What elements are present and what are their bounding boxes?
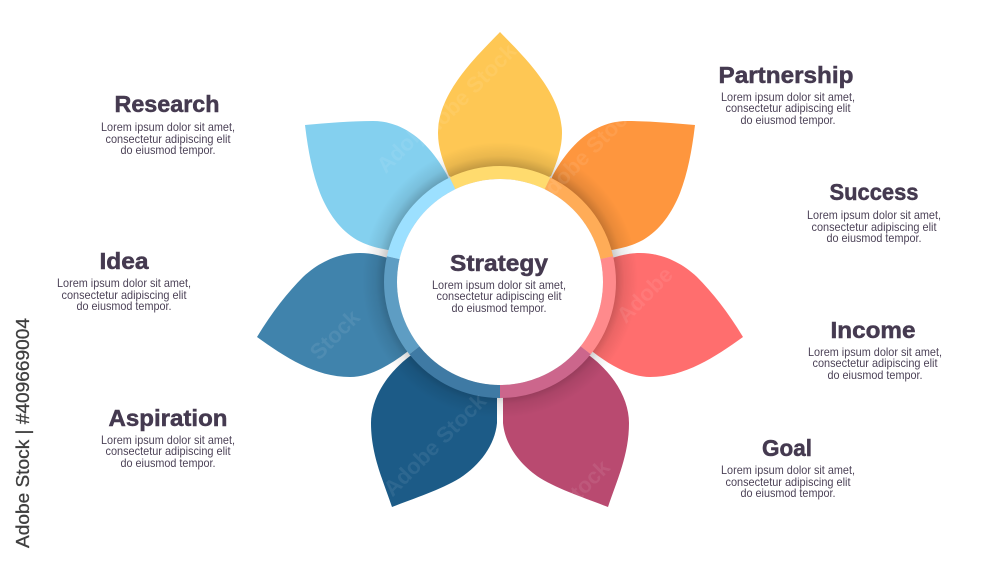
text block: Goal: Lorem ipsum dolor sit amet, (721, 463, 855, 477)
ring segment: light blue (387, 178, 455, 259)
stock watermark: Stock (555, 454, 615, 515)
text block: Income: do eiusmod tempor. (828, 368, 922, 382)
text block: Partnership: Lorem ipsum dolor sit amet, (721, 90, 855, 104)
text block: Aspiration: consectetur adipiscing elit (106, 444, 231, 458)
text block: Idea: consectetur adipiscing elit (62, 288, 187, 302)
text block: Strategy (432, 250, 566, 315)
ring segment: mid blue (384, 256, 420, 354)
text block: Partnership: consectetur adipiscing elit (726, 101, 851, 115)
text block: Strategy: Lorem ipsum dolor sit amet, (432, 278, 566, 292)
stock watermark: Stock (305, 304, 365, 365)
stock watermark: Adobe Stock (528, 98, 642, 211)
stock watermark: Adobe (612, 262, 678, 328)
ring segment: magenta (500, 346, 591, 398)
text block: Aspiration: do eiusmod tempor. (120, 456, 216, 470)
stock watermark (305, 38, 678, 515)
petal: orange (520, 121, 695, 250)
petal: mid blue (257, 253, 440, 377)
text block: Idea: Lorem ipsum dolor sit amet, (57, 276, 191, 290)
text block: Partnership: Partnership (718, 62, 854, 88)
text block: Research: consectetur adipiscing elit (106, 132, 231, 146)
text block: Success: consectetur adipiscing elit (812, 220, 937, 234)
text block: Income (808, 317, 942, 382)
text block: Idea: Idea (100, 248, 149, 274)
stock watermark: Adobe Stock (378, 388, 492, 501)
petal: magenta (503, 340, 629, 507)
ring segment: dark blue (409, 346, 500, 398)
text block: Success (807, 179, 941, 245)
text block: Research: Research (114, 91, 220, 117)
ring segment: coral (580, 256, 616, 354)
petal: light blue (305, 121, 480, 250)
text block: Goal: do eiusmod tempor. (740, 486, 836, 500)
petal: dark blue (371, 340, 497, 507)
text block: Income: consectetur adipiscing elit (812, 356, 938, 370)
center ring (384, 166, 616, 398)
text block: Strategy: do eiusmod tempor. (452, 301, 546, 315)
text block: Research (101, 91, 235, 157)
center circle (397, 179, 603, 385)
text block: Idea: do eiusmod tempor. (76, 299, 172, 313)
text block: Goal: consectetur adipiscing elit (726, 475, 851, 489)
text block: Partnership: do eiusmod tempor. (740, 113, 836, 127)
text block: Research: do eiusmod tempor. (120, 143, 216, 157)
ring shadow (362, 142, 638, 418)
stock watermark: Adobe (372, 112, 438, 178)
ring segment: orange (545, 178, 613, 259)
text block: Idea (57, 248, 191, 313)
text block: Strategy: consectetur adipiscing elit (436, 289, 562, 303)
text block: Partnership (718, 62, 855, 127)
petal: coral (560, 253, 743, 377)
text block: Strategy: Strategy (450, 250, 548, 276)
text block: Goal: Goal (762, 435, 812, 461)
text block: Research: Lorem ipsum dolor sit amet, (101, 120, 235, 134)
text block: Aspiration (101, 405, 235, 470)
text block: Success: Lorem ipsum dolor sit amet, (807, 208, 941, 222)
text block: Aspiration: Aspiration (108, 405, 228, 431)
text block: Success: Success (830, 179, 918, 205)
text block: Income: Income (830, 317, 916, 343)
ring segment: yellow (450, 166, 550, 189)
text block: Aspiration: Lorem ipsum dolor sit amet, (101, 433, 235, 447)
text block: Success: do eiusmod tempor. (826, 231, 922, 245)
petal: yellow (438, 32, 562, 200)
stock watermark: Adobe Stock (408, 38, 522, 151)
side credit: Adobe Stock number: Adobe Stock | #409669004 (13, 318, 33, 548)
text block: Income: Lorem ipsum dolor sit amet, (808, 345, 942, 359)
text block: Goal (721, 435, 855, 500)
